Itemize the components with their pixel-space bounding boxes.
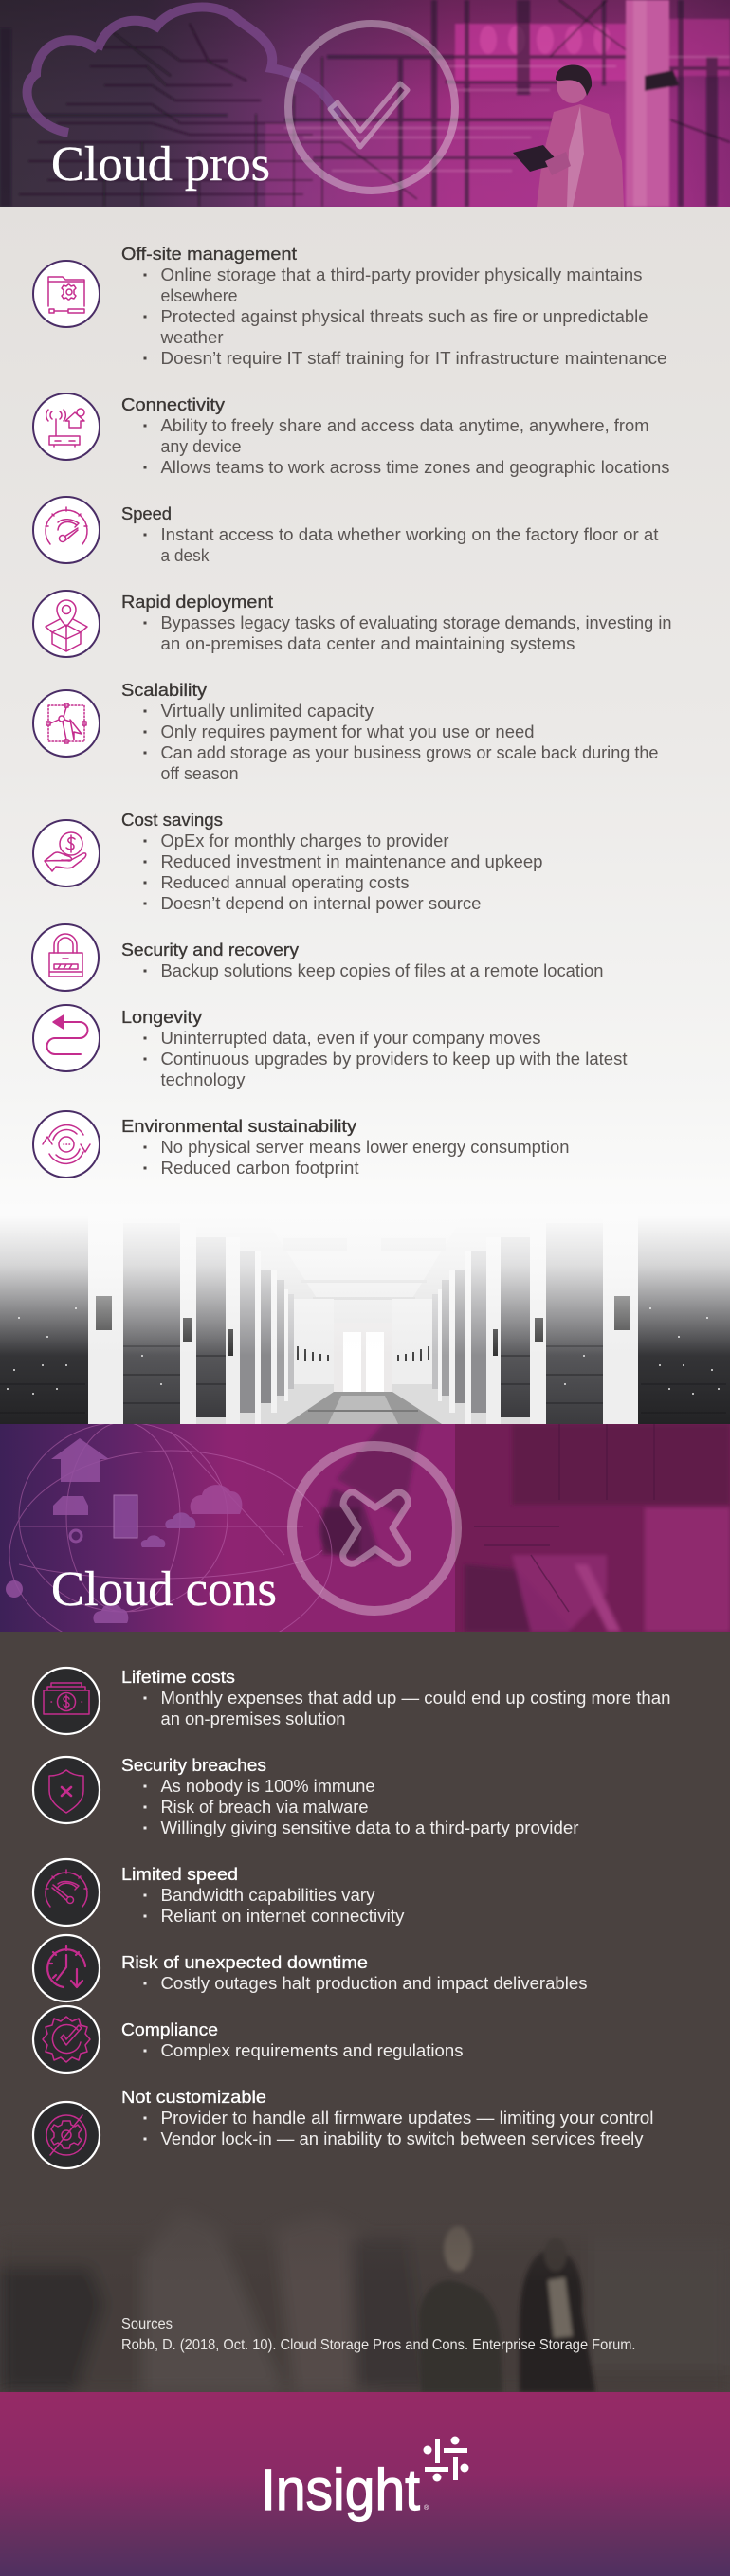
heading: Risk of unexpected downtime: [121, 1953, 368, 1972]
item: Longevity: [33, 1005, 628, 1089]
item: Security and recovery: [32, 924, 603, 991]
bullets: Only requires payment for what you use or need: [161, 722, 535, 741]
bullets: Instant access to data whether working on the factory floor or at: [161, 525, 658, 544]
bullets: Willingly giving sensitive data to a third-party provider: [161, 1818, 579, 1837]
bullets: [144, 1777, 579, 1837]
bullets: Monthly expenses that add up — could end up costing more than: [161, 1689, 671, 1708]
icon: box with location pin: [33, 591, 100, 657]
icon: banknote stack: [33, 1668, 100, 1734]
bullets: Protected against physical threats such as fire or unpredictable: [161, 307, 648, 326]
heading: Speed: [121, 504, 172, 523]
bullets: Doesn’t depend on internal power source: [161, 894, 482, 913]
bullets: Reduced carbon footprint: [161, 1159, 358, 1178]
heading: Limited speed: [121, 1865, 238, 1884]
bullets: [144, 1886, 404, 1926]
bullets: Provider to handle all firmware updates — limiting your control: [161, 2109, 654, 2128]
bullets: Ability to freely share and access data anytime, anywhere, from: [161, 416, 648, 435]
item: Not customizable: [33, 2088, 654, 2168]
bullets: elsewhere: [161, 286, 237, 305]
logo: Insight: Insight: [261, 2457, 420, 2522]
bullets: a desk: [161, 546, 210, 565]
bullets: Uninterrupted data, even if your company moves: [161, 1029, 540, 1048]
bullets: Virtually unlimited capacity: [161, 702, 374, 721]
bullets: Reliant on internet connectivity: [161, 1907, 404, 1926]
bullets: Risk of breach via malware: [161, 1798, 368, 1817]
bullets: Continuous upgrades by providers to keep up with the latest: [161, 1050, 628, 1069]
bullets: OpEx for monthly charges to provider: [161, 831, 449, 850]
item: Off-site management: [33, 245, 667, 368]
hero: cloud pros: [0, 0, 730, 207]
item: Limited speed: [33, 1859, 404, 1926]
photo: engineer with tablet: [513, 64, 624, 207]
heading: Rapid deployment: [121, 593, 273, 612]
bullets: [144, 2109, 654, 2148]
item: Lifetime costs: [33, 1668, 671, 1734]
bullets: As nobody is 100% immune: [161, 1777, 375, 1796]
bullets: any device: [161, 437, 241, 456]
bullets: Allows teams to work across time zones and geographic locations: [161, 458, 669, 477]
heading: Longevity: [121, 1008, 202, 1027]
icon: circular arrows: [33, 1111, 100, 1178]
bullets: Bandwidth capabilities vary: [161, 1886, 375, 1905]
item: Environmental sustainability: [33, 1111, 569, 1178]
icons: house, cloud and device silhouettes: [6, 1438, 242, 1623]
photo: colleagues walking past vehicles: [0, 2226, 597, 2392]
icon: slow speedometer: [33, 1859, 100, 1926]
icon: cross ring: [292, 1446, 457, 1611]
bullets: an on-premises data center and maintaining systems: [161, 634, 575, 653]
bullets: Bypasses legacy tasks of evaluating storage demands, investing in: [161, 613, 671, 632]
bullets: Doesn’t require IT staff training for IT infrastructure maintenance: [161, 349, 667, 368]
heading: Security and recovery: [121, 941, 299, 959]
bullets: [144, 525, 658, 565]
heading: Cost savings: [121, 811, 223, 830]
sources: Robb, D. (2018, Oct. 10). Cloud Storage Pros and Cons. Enterprise Storage Forum.: [121, 2337, 635, 2353]
bullets: No physical server means lower energy consumption: [161, 1138, 569, 1157]
item: Cost savings: [33, 811, 542, 913]
bullets: Online storage that a third-party provider physically maintains: [161, 265, 643, 284]
bullets: [144, 416, 669, 477]
bullets: Reduced annual operating costs: [161, 873, 410, 892]
bullets: technology: [161, 1070, 245, 1089]
bullets: Costly outages halt production and impact deliverables: [161, 1974, 588, 1993]
heading: Cloud cons: Cloud cons: [51, 1562, 277, 1617]
bullets: [144, 1689, 671, 1728]
list: cloud cons: [33, 1668, 671, 2168]
icon: clock with down arrow: [33, 1935, 100, 2001]
bullets: [144, 831, 542, 913]
icon: winding arrow: [33, 1005, 100, 1071]
item: Risk of unexpected downtime: [33, 1935, 588, 2001]
bullets: an on-premises solution: [161, 1709, 345, 1728]
icon: hand holding coin: [33, 820, 100, 886]
item: Security breaches: [33, 1756, 579, 1837]
icon: crossed-out gear: [33, 2102, 100, 2168]
bullets: off season: [161, 764, 239, 783]
icon: folder with gear and screwdriver: [33, 261, 100, 327]
bullets: Backup solutions keep copies of files at a remote location: [161, 961, 603, 980]
sources: Sources: [121, 2316, 173, 2332]
footer band: [0, 2392, 730, 2576]
bullets: Vendor lock-in — an inability to switch between services freely: [161, 2129, 643, 2148]
item: Rapid deployment: [33, 591, 671, 657]
item: Connectivity: [33, 393, 669, 477]
hero: cloud cons: [0, 1424, 730, 1632]
logo: Insight: ®: [424, 2504, 429, 2512]
list: cloud pros: [32, 245, 671, 1178]
icon: padlock: [32, 924, 99, 991]
item: Compliance: [33, 2006, 463, 2073]
heading: Environmental sustainability: [121, 1117, 356, 1136]
people silhouettes: [419, 2280, 502, 2392]
bullets: [144, 702, 658, 783]
icon: shield with cross: [33, 1757, 100, 1823]
heading: Security breaches: [121, 1756, 266, 1775]
heading: Connectivity: [121, 395, 225, 414]
bullets: Can add storage as your business grows or scale back during the: [161, 743, 658, 762]
item: Speed: [33, 497, 658, 565]
icon: speedometer: [33, 497, 100, 563]
bullets: [144, 1029, 628, 1089]
bullets: [144, 265, 667, 368]
bullets: [144, 1138, 569, 1178]
sources: [121, 2316, 635, 2353]
heading: Lifetime costs: [121, 1668, 235, 1687]
panel: cloud pros background: [0, 207, 730, 1250]
heading: Compliance: [121, 2020, 218, 2039]
logo: Insight: [261, 2437, 468, 2522]
heading: Scalability: [121, 681, 207, 700]
bullets: weather: [159, 328, 224, 347]
bullets: [144, 613, 671, 653]
icon: badge with check: [33, 2006, 100, 2073]
icon: cloud outline: [27, 8, 338, 133]
heading: Off-site management: [121, 245, 297, 264]
bullets: Complex requirements and regulations: [161, 2041, 463, 2060]
panel: cloud cons background: [0, 1632, 730, 2392]
bullets: Reduced investment in maintenance and upkeep: [161, 852, 542, 871]
icon: router with signal and house: [33, 393, 100, 460]
heading: Not customizable: [121, 2088, 266, 2107]
icon: scaling handles and cursor: [33, 690, 100, 757]
photo: server room corridor: [0, 1204, 730, 1424]
item: Scalability: [33, 681, 658, 783]
icon: check ring: [288, 24, 455, 191]
heading: Cloud pros: Cloud pros: [51, 137, 270, 192]
